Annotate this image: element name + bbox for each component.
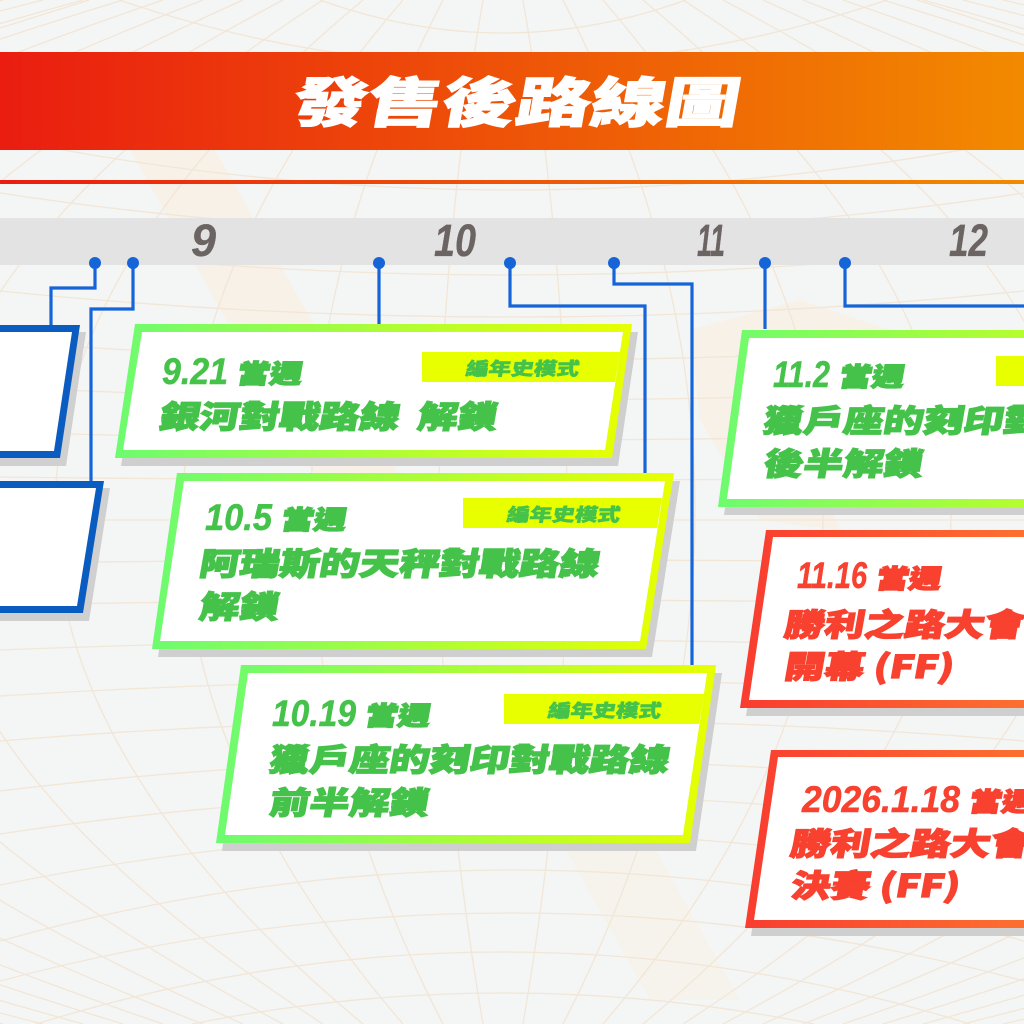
mode tag bbox=[504, 694, 704, 724]
mode tag bbox=[422, 352, 620, 382]
mode tag bbox=[463, 498, 662, 528]
date: 10.5 bbox=[205, 497, 273, 538]
month 12: 12 bbox=[949, 215, 988, 266]
description: 前半解鎖 bbox=[266, 778, 434, 824]
panel: 9.21 milestone bbox=[115, 324, 638, 466]
panel: 2026.1.18 milestone, cropped bbox=[745, 750, 1024, 936]
title text: 發售後路線圖 bbox=[287, 59, 748, 138]
date: 11.16 bbox=[797, 555, 867, 596]
description: 開幕 (FF) bbox=[781, 642, 959, 688]
date: 9.21 bbox=[162, 351, 228, 392]
date bbox=[797, 555, 946, 596]
date: 當週 bbox=[874, 558, 946, 596]
mode tag: 編年史模式 bbox=[546, 696, 664, 722]
panel: 11.2 milestone, cropped bbox=[718, 330, 1024, 515]
month 11: 11 bbox=[697, 215, 725, 266]
description bbox=[787, 819, 1024, 907]
date: 11.2 bbox=[773, 354, 830, 395]
description bbox=[266, 735, 674, 824]
date: 10.19 bbox=[272, 693, 356, 734]
description: 解鎖 bbox=[196, 582, 284, 628]
month 10: 10 bbox=[434, 215, 476, 266]
description bbox=[196, 539, 604, 628]
description: 阿瑞斯的天秤對戰路線 bbox=[196, 539, 604, 585]
mode tag: 編年史模式 bbox=[464, 354, 582, 380]
description: 決賽 (FF) bbox=[787, 861, 965, 907]
description: 勝利之路大會 bbox=[781, 600, 1024, 646]
panel: 11.16 milestone, cropped bbox=[740, 530, 1024, 716]
divider line bbox=[0, 180, 1024, 184]
date: 當週 bbox=[363, 695, 435, 733]
mode tag: 編年史模式 bbox=[505, 500, 623, 526]
mode tag bbox=[996, 356, 1024, 386]
month 9: 9 bbox=[191, 215, 216, 266]
date: 當週 bbox=[235, 353, 307, 391]
date bbox=[162, 351, 307, 392]
description: 銀河對戰路線 解鎖 bbox=[156, 392, 503, 438]
panel: 10.19 milestone bbox=[216, 665, 722, 851]
date bbox=[272, 693, 435, 734]
date: 當週 bbox=[279, 499, 351, 537]
date bbox=[773, 354, 909, 395]
timeline dots bbox=[89, 257, 851, 269]
title banner bbox=[0, 52, 1024, 150]
date: 當週 bbox=[837, 356, 909, 394]
panel: blue lower, cropped bbox=[0, 481, 110, 621]
date: 2026.1.18 bbox=[801, 779, 960, 820]
date bbox=[205, 497, 351, 538]
panel: 10.5 milestone bbox=[152, 473, 680, 657]
panel: blue upper, cropped bbox=[0, 325, 86, 466]
connector lines bbox=[51, 263, 1024, 666]
description: 獵戶座的刻印對戰路線 bbox=[266, 735, 674, 781]
description bbox=[781, 600, 1024, 688]
month timeline bar bbox=[0, 215, 1024, 266]
description bbox=[760, 396, 1024, 485]
description: 後半解鎖 bbox=[760, 439, 928, 485]
